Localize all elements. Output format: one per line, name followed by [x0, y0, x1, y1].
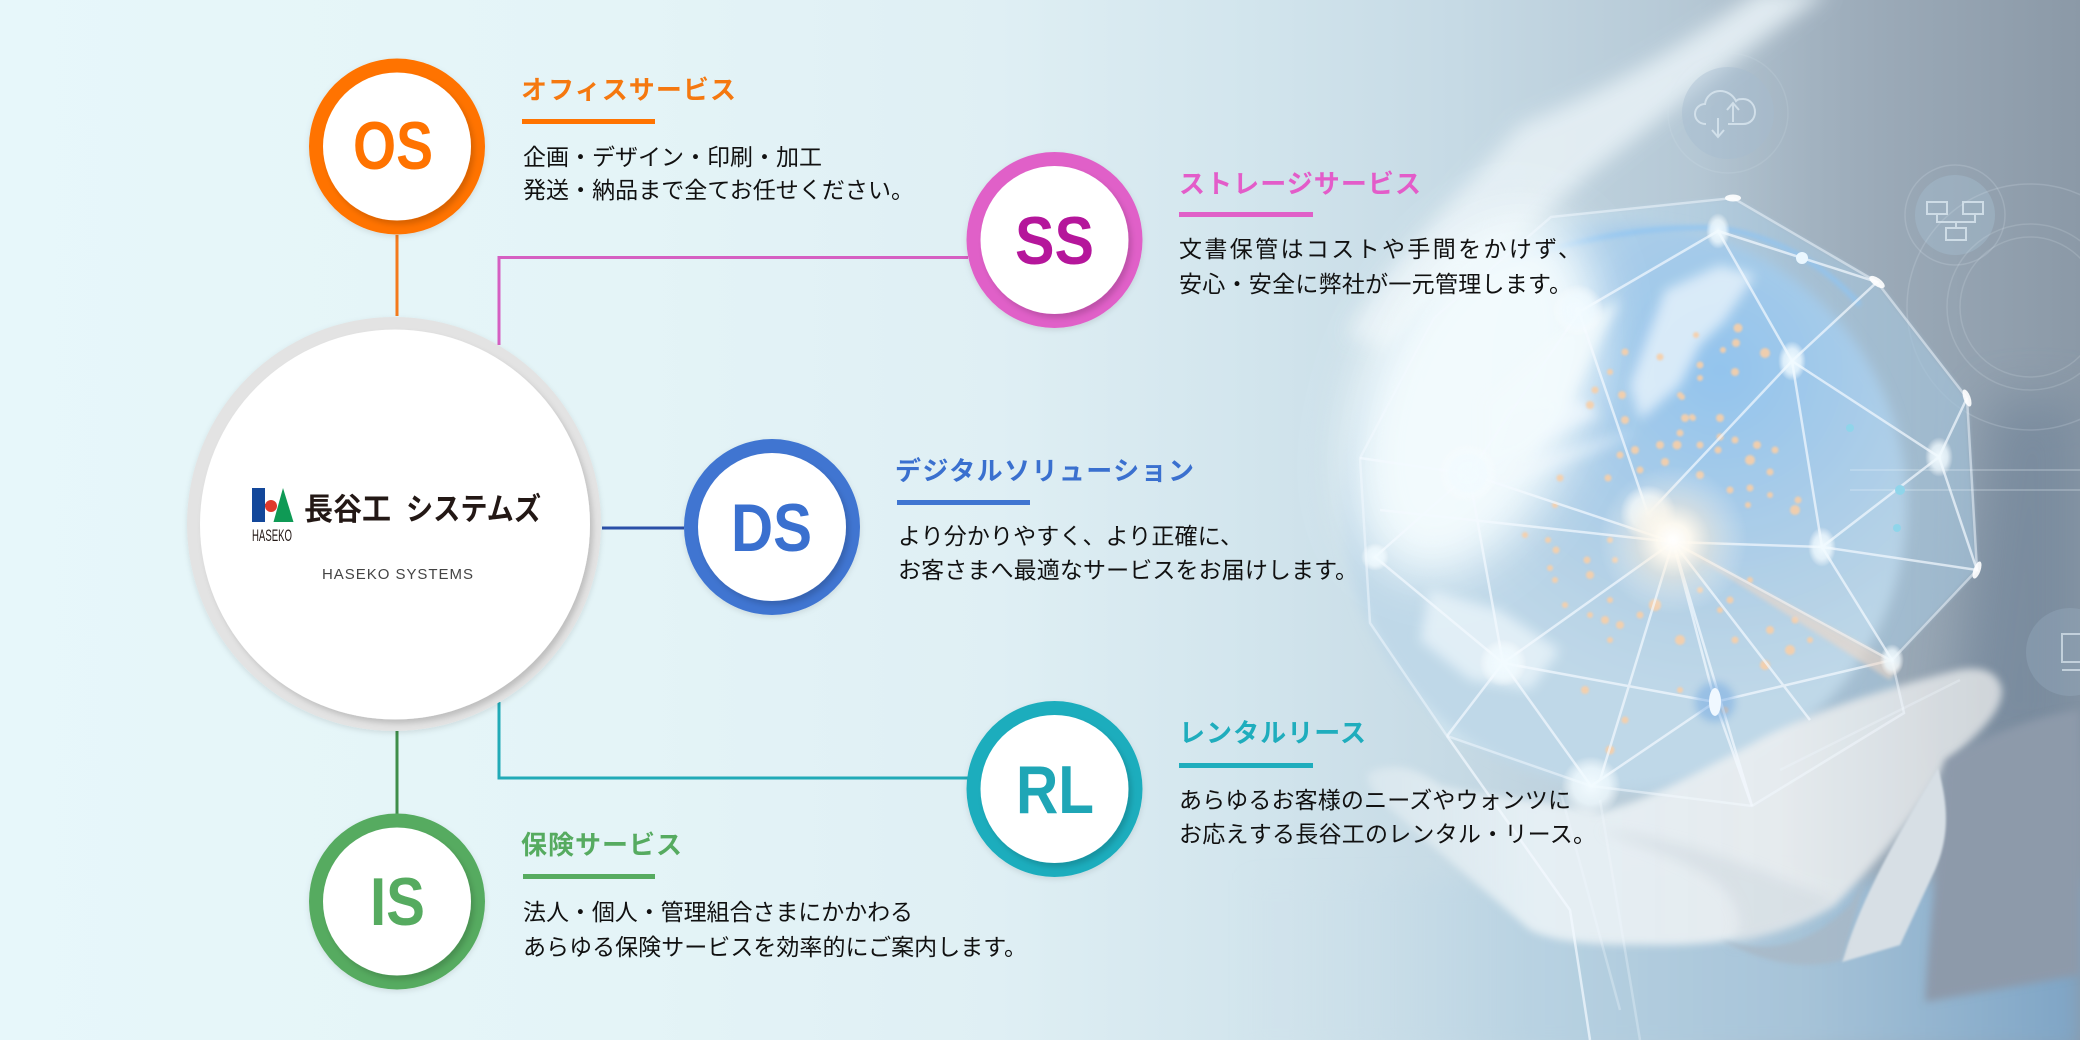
underline — [897, 500, 1030, 505]
connector: OS orange line — [396, 235, 398, 316]
sphere vivid top edge — [1490, 228, 1860, 305]
panel: digital solution — [895, 456, 1358, 583]
peach light streak — [1673, 542, 1900, 680]
hand — [1368, 669, 2002, 945]
globe translucent facets — [1360, 198, 1977, 806]
node: IS: IS — [370, 864, 425, 940]
description: 安心・安全に弊社が一元管理します。 — [1179, 271, 1572, 297]
description: 法人・個人・管理組合さまにかかわる — [523, 899, 913, 925]
description: あらゆるお客様のニーズやウォンツに — [1179, 787, 1571, 813]
hand shadow on wrist — [1720, 880, 1865, 965]
description: より分かりやすく、より正確に、 — [898, 523, 1243, 549]
globe orange data dots — [1522, 324, 1813, 754]
node: IS — [309, 814, 485, 990]
connector: IS green line — [396, 731, 398, 814]
heading: ストレージサービス — [1179, 169, 1421, 199]
shirt sleeve highlight — [1345, 0, 1830, 360]
icon: network — [1905, 165, 2005, 265]
hand palm crease shading — [1600, 830, 1835, 945]
description: 発送・納品まで全てお任せください。 — [523, 177, 914, 203]
dark chest band — [1950, 400, 2080, 760]
center company circle — [187, 317, 601, 731]
connector: SS pink line — [499, 258, 968, 345]
company name Japanese: 長谷工 — [304, 492, 391, 527]
description: あらゆる保険サービスを効率的にご案内します。 — [523, 934, 1027, 960]
company name English: HASEKO SYSTEMS — [322, 566, 473, 583]
center flare — [1598, 465, 1748, 615]
node: DS: DS — [731, 490, 812, 566]
shirt cuff — [1842, 768, 1946, 962]
description: 文書保管はコストや手間をかけず、 — [1179, 236, 1581, 262]
company name katakana: システムズ — [406, 492, 541, 527]
heading: レンタルリース — [1179, 718, 1366, 748]
heading: オフィスサービス — [521, 75, 736, 105]
globe network lines — [1360, 198, 2080, 1040]
description — [523, 899, 1027, 960]
globe sphere — [1343, 223, 1907, 787]
HASEKO logo mark: HASEKO — [252, 526, 292, 545]
connector: DS blue line — [602, 526, 684, 530]
icon: target rings — [1907, 184, 2080, 430]
node: SS — [966, 152, 1142, 328]
photo: businessman holding a digital globe — [1250, 0, 2080, 1040]
description — [523, 144, 914, 203]
suit jacket — [1700, 0, 2080, 1040]
sleeve — [1925, 710, 2080, 1002]
node: OS: OS — [353, 108, 433, 184]
description: お応えする長谷工のレンタル・リース。 — [1179, 821, 1596, 847]
heading: 保険サービス — [521, 830, 682, 860]
lower blue area — [1250, 880, 2080, 1040]
HASEKO logo mark — [252, 488, 294, 545]
globe network nodes — [1361, 194, 1983, 816]
heading: デジタルソリューション — [895, 456, 1194, 486]
globe continents — [1420, 265, 1755, 690]
description — [1179, 787, 1596, 847]
node: SS: SS — [1015, 203, 1094, 279]
decorative tech icons — [1668, 53, 2080, 696]
node: RL: RL — [1016, 752, 1094, 828]
panel: rental lease — [1179, 718, 1596, 847]
node: DS — [684, 439, 860, 615]
node: OS — [309, 58, 485, 234]
description: お客さまへ最適なサービスをお届けします。 — [898, 557, 1358, 583]
globe left white glow — [1302, 178, 1648, 612]
node: RL — [966, 701, 1142, 877]
connector: RL teal line — [499, 702, 968, 778]
underline — [522, 119, 655, 124]
description — [898, 523, 1358, 583]
underline — [1179, 212, 1313, 217]
description — [1179, 236, 1581, 297]
icon: monitor — [2026, 608, 2080, 696]
panel: storage service — [1179, 169, 1581, 297]
underline — [523, 874, 655, 879]
icon: cloud — [1668, 53, 1788, 173]
underline — [1179, 763, 1313, 768]
panel: insurance service — [521, 830, 1027, 960]
description: 企画・デザイン・印刷・加工 — [523, 144, 822, 170]
panel: office service — [521, 75, 914, 203]
